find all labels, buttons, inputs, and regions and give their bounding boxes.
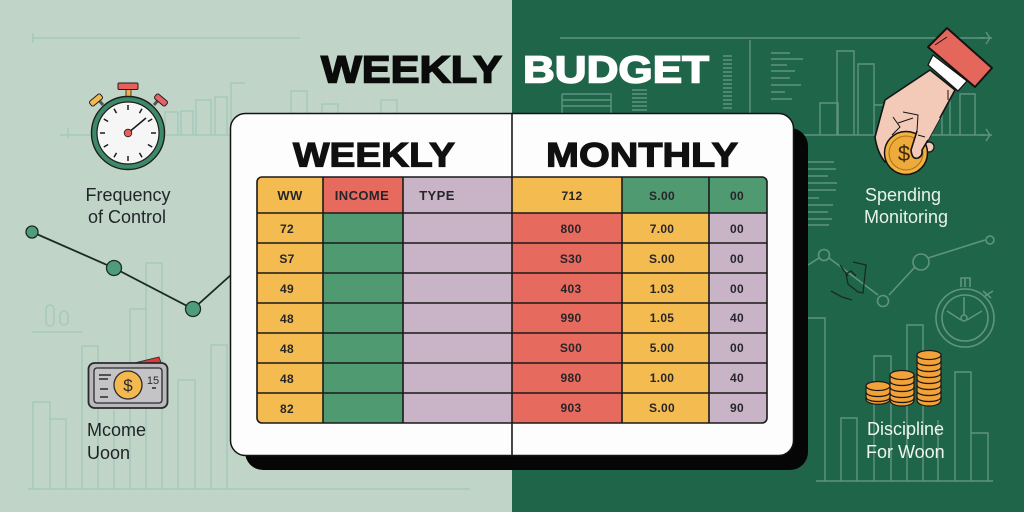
- panel: card shadow: [245, 128, 808, 470]
- heading: weekly and monthly: WEEKLY: [293, 136, 455, 174]
- table column: decimal amounts: S.00: [649, 401, 675, 415]
- text: Discipline For Woon: Discipline: [867, 419, 944, 439]
- icon: coin stacks: [866, 350, 941, 406]
- chart: faint right background bars: [560, 32, 993, 481]
- table header text: 712: [562, 189, 582, 203]
- text: Mcome Uoon: [87, 420, 146, 463]
- table header text: S.00: [649, 189, 675, 203]
- text: Spending Monitoring: [864, 185, 948, 227]
- text: Discipline For Woon: [866, 419, 945, 462]
- text: Discipline For Woon: For Woon: [866, 442, 945, 462]
- text: Spending Monitoring: Spending: [865, 185, 941, 205]
- table column: week numbers: 48: [280, 372, 294, 386]
- table header text: WW: [277, 188, 303, 203]
- panel: left background: [0, 0, 512, 512]
- table column: week numbers: 48: [280, 312, 294, 326]
- table column: last values: 00: [730, 282, 744, 296]
- text: Frequency of Control: of Control: [88, 207, 166, 227]
- table header text: INCOME: [335, 188, 389, 203]
- table column: week numbers: [279, 222, 295, 416]
- icon: hand holding coin: [875, 28, 992, 174]
- table column: monthly amounts: [560, 222, 582, 415]
- icon: faint background stopwatch: [936, 278, 994, 347]
- table column: last values: 00: [730, 341, 744, 355]
- table header text: 00: [730, 189, 744, 203]
- text: Mcome Uoon: Uoon: [87, 443, 130, 463]
- table column: week numbers: 82: [280, 402, 294, 416]
- table column: week numbers: S7: [279, 252, 295, 266]
- text: Spending Monitoring: Monitoring: [864, 207, 948, 227]
- panel: budget card: [230, 114, 794, 456]
- table header text: TYPE: [419, 188, 455, 203]
- table column: monthly amounts: 990: [561, 311, 581, 325]
- text: Frequency of Control: [85, 185, 171, 227]
- table grid lines: [257, 177, 767, 423]
- table header text: [277, 188, 744, 203]
- icon: banknote with dollar coin: $: [123, 376, 133, 395]
- table column: monthly amounts: 800: [561, 222, 581, 236]
- table column: week numbers: 72: [280, 222, 294, 236]
- table column: monthly amounts: S00: [560, 341, 582, 355]
- icon: stopwatch: [89, 83, 168, 170]
- icon: hand holding coin: $: [898, 141, 910, 166]
- title: [321, 50, 709, 92]
- table column: last values: 00: [730, 222, 744, 236]
- heading: weekly and monthly: [293, 136, 738, 174]
- table column: week numbers: 49: [280, 282, 294, 296]
- table: budget grid: [257, 177, 767, 423]
- title: BUDGET: [523, 50, 709, 92]
- table column: last values: 90: [730, 401, 744, 415]
- table column: last values: [730, 222, 744, 415]
- chart: faint right line graph: [808, 236, 994, 306]
- table column: decimal amounts: S.00: [649, 252, 675, 266]
- icon: banknote with dollar coin: [88, 357, 168, 408]
- panel: right background: [512, 0, 1024, 512]
- icon: banknote with dollar coin: 15: [147, 375, 159, 387]
- table column: monthly amounts: 403: [561, 282, 581, 296]
- table column: decimal amounts: 1.05: [650, 311, 674, 325]
- table column: decimal amounts: [649, 222, 675, 415]
- title: WEEKLY: [321, 50, 502, 92]
- table column: decimal amounts: 1.03: [650, 282, 674, 296]
- chart: left foreground line graph: [26, 226, 232, 316]
- text: Frequency of Control: Frequency: [85, 185, 171, 205]
- icon: black scribble: [831, 262, 866, 300]
- table fills: [257, 177, 767, 423]
- table column: last values: 00: [730, 252, 744, 266]
- table column: last values: 40: [730, 311, 744, 325]
- divider: card centre line: [511, 113, 513, 455]
- table column: week numbers: 48: [280, 342, 294, 356]
- table column: last values: 40: [730, 371, 744, 385]
- chart: faint left background bars: [28, 33, 470, 489]
- table column: decimal amounts: 1.00: [650, 371, 674, 385]
- text: Mcome Uoon: Mcome: [87, 420, 146, 440]
- table column: decimal amounts: 5.00: [650, 341, 674, 355]
- table column: decimal amounts: 7.00: [650, 222, 674, 236]
- table column: monthly amounts: 903: [561, 401, 581, 415]
- table column: monthly amounts: S30: [560, 252, 582, 266]
- heading: weekly and monthly: MONTHLY: [546, 136, 738, 174]
- table column: monthly amounts: 980: [561, 371, 581, 385]
